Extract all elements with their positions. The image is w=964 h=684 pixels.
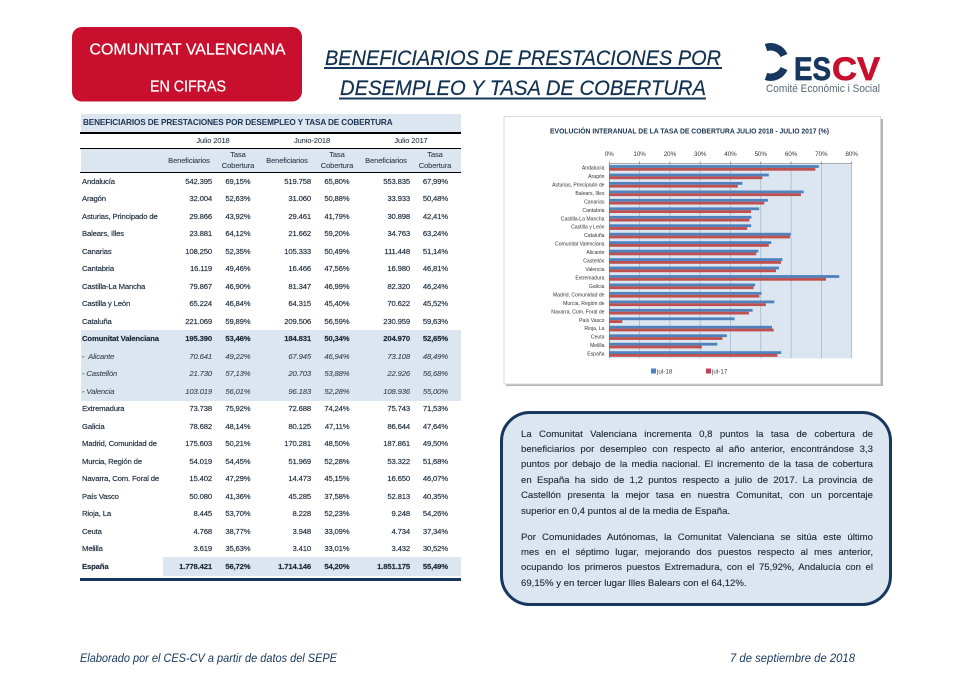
data table <box>80 114 461 581</box>
row: Cantabria <box>82 264 448 273</box>
row: Andalucía: 69,15% <box>225 176 250 186</box>
row: Alicante: 67.945 <box>288 352 311 360</box>
row: Murcia: 53.322 <box>387 456 410 466</box>
row: Comunitat Valenciana: 53,46% <box>225 334 250 343</box>
row: Aragón <box>82 194 448 203</box>
row: Asturias: 41,79% <box>324 212 350 220</box>
row: Asturias: Asturias, Principado de <box>82 212 158 220</box>
row: Extremadura: 75,92% <box>225 404 250 413</box>
row: España: España <box>82 562 108 570</box>
row: Valencia: 103.019 <box>185 386 212 396</box>
legend: jul-17 <box>711 368 728 376</box>
row: Galicia: 80.125 <box>288 422 311 430</box>
row: Madrid <box>82 439 448 448</box>
row: Canarias: 111.448 <box>384 246 410 256</box>
row: Galicia: 48,14% <box>225 422 250 430</box>
paragraph 2 <box>521 532 873 589</box>
row: Melilla: 30,52% <box>423 544 448 553</box>
row: Melilla: Melilla <box>82 544 103 553</box>
row: España: 1.851.175 <box>377 562 410 570</box>
row: Castilla y León: 70.622 <box>387 299 410 308</box>
row: Navarra: 47,29% <box>225 474 250 483</box>
row: Rioja <box>82 509 448 518</box>
row: Balears: 21.662 <box>288 229 311 238</box>
column group headers: Junio-2018 <box>294 136 330 145</box>
column sub-headers: Cobertura <box>222 160 254 170</box>
row: Castilla y León: 64.315 <box>288 299 311 308</box>
row: Cantabria: 16.119 <box>190 264 212 273</box>
row: España: 55,49% <box>423 562 448 570</box>
row: Cantabria: 47,56% <box>324 264 350 273</box>
bars and category labels: Valencia <box>585 267 605 273</box>
row: España: 56,72% <box>225 562 250 570</box>
row: Murcia: 52,28% <box>324 456 350 466</box>
row: Murcia: 54.019 <box>189 456 212 466</box>
axis labels: 80% <box>846 151 858 158</box>
column sub-headers: Cobertura <box>321 160 353 170</box>
row: Andalucía: 542.395 <box>185 176 212 186</box>
bars and category labels: Cataluña <box>584 233 605 239</box>
row: Galicia: 86.644 <box>387 422 410 430</box>
legend: jul-18 <box>656 368 673 376</box>
row: Aragón: Aragón <box>82 194 106 203</box>
row: Castilla-La Mancha: 46,90% <box>225 282 250 290</box>
row: Extremadura: 72.688 <box>288 404 311 413</box>
row: Alicante: 70.641 <box>189 352 212 360</box>
row: Cantabria: 16.466 <box>288 264 311 273</box>
row: Alicante: 49,22% <box>225 352 250 360</box>
bars and category labels: Murcia, Región de <box>563 301 605 307</box>
logo: CES CV <box>764 43 881 95</box>
row: País Vasco: 50.080 <box>189 492 212 500</box>
row: Melilla: 3.432 <box>392 544 410 553</box>
row: Cantabria: 16.980 <box>387 264 410 273</box>
header badge: Comunitat Valenciana en cifras: COMUNITAT VALENCIANA <box>90 41 286 58</box>
row: Navarra: 45,15% <box>324 474 350 483</box>
paragraph 1: superior en 0,4 puntos al de la media de España. <box>521 506 730 517</box>
row: Extremadura: 74,24% <box>324 404 350 413</box>
paragraph 2: 69,15% y en tercer lugar Illes Balears con el 64,12%. <box>521 578 747 589</box>
Comunitat Valenciana highlight band <box>81 330 461 400</box>
row: Murcia: 51.969 <box>288 456 311 466</box>
row: Comunitat Valenciana: 50,34% <box>324 334 350 343</box>
text panel: commentary <box>500 411 892 606</box>
row: Madrid: 48,50% <box>324 439 350 448</box>
footer source note: Elaborado por el CES-CV a partir de datos del SEPE <box>80 653 337 665</box>
logo: CES CV: ES <box>794 51 831 87</box>
row: Cataluña: Cataluña <box>82 316 112 326</box>
row: Madrid: 50,21% <box>225 439 250 448</box>
row: Valencia: 55,00% <box>423 386 448 396</box>
row: Castilla-La Mancha: 46,24% <box>423 282 448 290</box>
axis labels: 0% <box>605 151 614 158</box>
row: Andalucía: 67,99% <box>423 176 448 186</box>
axis labels: 10% <box>633 151 646 158</box>
row: Valencia: 52,28% <box>324 386 350 396</box>
column sub-headers: Tasa <box>329 150 345 159</box>
column sub-headers: Beneficiarios <box>168 156 210 164</box>
row: Aragón: 33.933 <box>387 194 410 203</box>
row: Castellón: 20.703 <box>288 369 311 378</box>
row: España: 1.714.146 <box>278 562 311 570</box>
column group headers: Julio 2017 <box>394 136 428 145</box>
paragraph 1: puntos por debajo de la media nacional. El incremento de la tasa de cobertura <box>521 459 873 470</box>
axis labels: 50% <box>755 151 767 158</box>
bars and category labels <box>551 165 839 358</box>
row: Comunitat Valenciana: 204.970 <box>383 334 410 343</box>
paragraph 1: beneficiarios por desempleo con respecto al año anterior, encontrándose 3,3 <box>521 444 873 455</box>
row: España: 54,20% <box>324 562 350 570</box>
table title band: BENEFICIARIOS DE PRESTACIONES POR DESEMPLEO Y TASA DE COBERTURA <box>83 118 393 127</box>
row: Andalucía: Andalucía <box>82 176 115 186</box>
row: Canarias: 50,49% <box>324 246 350 256</box>
row: Ceuta: 33,09% <box>324 526 350 536</box>
row: Murcia: Murcia, Región de <box>82 456 142 466</box>
row: Comunitat Valenciana: 195.390 <box>185 334 212 343</box>
bars and category labels: Canarias <box>584 199 605 205</box>
row: Aragón: 31.060 <box>288 194 311 203</box>
bars and category labels: Balears, Illes <box>575 191 605 197</box>
bars and category labels: Aragón <box>588 174 605 180</box>
bars and category labels: Navarra, Com. Foral de <box>551 309 605 315</box>
row: Murcia: 51,68% <box>423 456 448 466</box>
row: Asturias: 29.866 <box>189 212 212 220</box>
row: Extremadura: 73.738 <box>189 404 212 413</box>
row: Ceuta: Ceuta <box>82 526 102 536</box>
row: Valencia <box>82 386 448 396</box>
España highlight band <box>163 557 461 576</box>
bars and category labels: Madrid, Comunidad de <box>553 292 605 298</box>
row: Balears: 63,24% <box>423 229 448 238</box>
row: Castilla-La Mancha: Castilla-La Mancha <box>82 282 145 290</box>
row: Cataluña: 59,63% <box>423 316 448 326</box>
column sub-headers: Tasa <box>427 150 443 159</box>
bars and category labels: País Vasco <box>579 318 605 324</box>
row: Castilla-La Mancha: 81.347 <box>288 282 311 290</box>
row: Balears: 23.881 <box>189 229 212 238</box>
axis labels: 30% <box>694 151 707 158</box>
row: País Vasco: 37,58% <box>324 492 350 500</box>
row: Andalucía: 519.758 <box>284 176 311 186</box>
paragraph 2: mes en el séptimo lugar, mejorando dos puestos respecto al mes anterior, <box>521 547 873 558</box>
row: Castellón: 56,68% <box>423 369 448 378</box>
row: Madrid: 187.861 <box>383 439 410 448</box>
plot area and grid <box>609 162 852 358</box>
column sub-headers <box>81 149 461 172</box>
row: Rioja: 53,70% <box>225 509 250 518</box>
axis labels: 40% <box>724 151 737 158</box>
row: Melilla: 3.410 <box>292 544 311 553</box>
row: Asturias: 30.898 <box>387 212 410 220</box>
bars and category labels: Asturias, Principado de <box>552 182 605 188</box>
row: Castellón: 53,88% <box>324 369 350 378</box>
row: Aragón: 32.004 <box>189 194 212 203</box>
row: Alicante: 46,94% <box>324 352 350 360</box>
column sub-headers: Beneficiarios <box>365 156 407 164</box>
header badge: Comunitat Valenciana en cifras <box>72 27 302 102</box>
row: Aragón: 52,63% <box>225 194 250 203</box>
row: Navarra: 14.473 <box>288 474 311 483</box>
bars and category labels: Alicante <box>586 250 605 256</box>
bars and category labels: Comunitat Valenciana <box>555 242 605 248</box>
row: Valencia: 96.183 <box>288 386 311 396</box>
header badge: Comunitat Valenciana en cifras: EN CIFRAS <box>150 78 226 96</box>
row: Castilla y León: 45,40% <box>324 299 350 308</box>
row: Ceuta: 4.734 <box>392 526 410 536</box>
row: País Vasco: 52.813 <box>387 492 410 500</box>
bars and category labels: Castilla-La Mancha <box>561 216 605 222</box>
row: Castilla-La Mancha: 82.320 <box>387 282 410 290</box>
row: Cataluña <box>82 316 448 326</box>
row: Navarra <box>82 474 448 483</box>
paragraph 2: Por Comunidades Autónomas, la Comunitat Valenciana se sitúa este último <box>521 532 873 542</box>
row: Asturias <box>82 212 448 221</box>
row: Cantabria: 46,81% <box>423 264 448 273</box>
row: Comunitat Valenciana: 52,65% <box>423 334 448 343</box>
row: Rioja: Rioja, La <box>82 509 111 518</box>
row: Castellón <box>82 369 448 378</box>
row: Madrid: 175.603 <box>185 439 212 448</box>
row: Castellón: 22.926 <box>387 369 410 378</box>
row: Navarra: Navarra, Com. Foral de <box>82 474 159 483</box>
row: Melilla: 3.619 <box>194 544 212 553</box>
row: Valencia: - Valencia <box>82 386 114 396</box>
logo: CES CV: CV <box>832 51 881 87</box>
row: Cantabria: Cantabria <box>82 264 114 273</box>
column sub-headers: Tasa <box>230 150 246 159</box>
row: Comunitat Valenciana: 184.831 <box>284 334 311 343</box>
axis labels: 20% <box>664 151 677 158</box>
row: Comunitat Valenciana: Comunitat Valenciana <box>82 334 159 343</box>
row: Castilla-La Mancha <box>82 282 448 290</box>
legend <box>651 368 728 376</box>
row: Rioja: 52,23% <box>324 509 350 518</box>
row: Murcia: 54,45% <box>225 456 250 466</box>
row: Comunitat Valenciana <box>82 334 448 343</box>
column group headers: Julio 2018 <box>196 136 230 145</box>
chart title: EVOLUCIÓN INTERANUAL DE LA TASA DE COBERTURA JULIO 2018 - JULIO 2017 (%) <box>550 126 829 136</box>
row: Canarias <box>82 246 448 256</box>
title <box>324 47 722 100</box>
row: Ceuta: 4.768 <box>194 526 212 536</box>
row: Andalucía: 553.835 <box>383 176 410 186</box>
row: Ceuta: 3.948 <box>292 526 311 536</box>
row: Aragón: 50,88% <box>324 194 350 203</box>
paragraph 1: La Comunitat Valenciana incrementa 0,8 puntos la tasa de cobertura de <box>521 428 873 440</box>
row: Murcia <box>82 456 448 466</box>
row: Rioja: 8.445 <box>194 509 212 518</box>
row: Galicia: 78.682 <box>189 422 212 430</box>
bars and category labels: Melilla <box>590 343 605 349</box>
row: Madrid: Madrid, Comunidad de <box>82 439 157 448</box>
row: País Vasco: 40,35% <box>423 492 448 500</box>
row: Navarra: 16.650 <box>387 474 410 483</box>
row: Cataluña: 56,59% <box>324 316 350 326</box>
row: Rioja: 54,26% <box>423 509 448 518</box>
paragraph 1: Castellón presenta la mejor tasa en nuestra Comunitat, con un porcentaje <box>521 490 873 501</box>
row: Balears: 64,12% <box>225 229 250 238</box>
bars and category labels: Castellón <box>583 259 605 265</box>
row: España <box>82 562 448 571</box>
row: Melilla: 35,63% <box>225 544 250 553</box>
row: País Vasco <box>82 492 448 500</box>
row: Alicante: 48,49% <box>423 352 448 360</box>
row: Asturias: 42,41% <box>423 212 448 220</box>
bars and category labels: Rioja, La <box>584 326 605 332</box>
row: Extremadura: 71,53% <box>423 404 448 413</box>
row: Andalucía <box>82 176 448 186</box>
row: Cataluña: 230.959 <box>383 316 410 326</box>
row: Castellón: 57,13% <box>225 369 250 378</box>
row: Castilla y León: 46,84% <box>225 299 250 308</box>
row: Aragón: 50,48% <box>423 194 448 203</box>
row: España: 1.778.421 <box>179 562 212 570</box>
panel: bar chart <box>504 116 883 386</box>
row: Castellón: 21.730 <box>189 369 212 378</box>
bars and category labels: Ceuta <box>591 335 605 341</box>
axis labels <box>605 151 858 158</box>
row: Valencia: 56,01% <box>225 386 250 396</box>
row: Asturias: 43,92% <box>225 212 250 220</box>
row: Castellón: - Castellón <box>82 369 117 378</box>
row: Ceuta: 38,77% <box>225 526 250 536</box>
bars and category labels: España <box>587 352 605 358</box>
row: Rioja: 8.228 <box>292 509 311 518</box>
row: Balears <box>82 229 448 238</box>
title: DESEMPLEO Y TASA DE COBERTURA <box>340 77 706 100</box>
axis labels: 70% <box>815 151 828 158</box>
bars and category labels: Galicia <box>589 284 605 290</box>
axis labels: 60% <box>785 151 798 158</box>
title: BENEFICIARIOS DE PRESTACIONES POR <box>325 47 721 70</box>
row: Valencia: 108.936 <box>383 386 410 396</box>
row: Navarra: 46,07% <box>423 474 448 483</box>
row: Cantabria: 49,46% <box>225 264 250 273</box>
row: Alicante: 73.108 <box>387 352 410 360</box>
row: Navarra: 15.402 <box>189 474 212 483</box>
row: Cataluña: 59,89% <box>225 316 250 326</box>
chart frame <box>504 116 883 386</box>
row: Extremadura: 75.743 <box>387 404 410 413</box>
row: Asturias: 29.461 <box>288 212 311 220</box>
bars and category labels: Extremadura <box>575 276 605 282</box>
row: Canarias: 108.250 <box>185 246 212 256</box>
row: Galicia <box>82 422 448 430</box>
row: Madrid: 170.281 <box>284 439 311 448</box>
bars and category labels: Cantabria <box>582 208 605 214</box>
paragraph 1: en España ha sido de 1,2 puntos respecto a julio de 2017. La provincia de <box>521 475 873 486</box>
row: País Vasco: País Vasco <box>82 492 119 500</box>
row: Galicia: 47,11% <box>325 422 350 430</box>
row: Alicante: - Alicante <box>82 352 114 360</box>
column group headers <box>196 136 428 145</box>
row: País Vasco: 45.285 <box>288 492 311 500</box>
footer date: 7 de septiembre de 2018 <box>730 653 856 665</box>
row: Balears: 59,20% <box>324 229 350 238</box>
row: Cataluña: 221.069 <box>185 316 212 326</box>
row: Andalucía: 65,80% <box>324 176 350 186</box>
row: Melilla <box>82 544 448 553</box>
row: Castilla-La Mancha: 79.867 <box>189 282 212 290</box>
paragraph 1 <box>521 428 873 517</box>
row: Madrid: 49,50% <box>423 439 448 448</box>
row: Alicante <box>82 352 448 360</box>
row: Extremadura <box>82 404 448 413</box>
table title band <box>81 114 461 132</box>
row: Cataluña: 209.506 <box>284 316 311 326</box>
row: Ceuta <box>82 526 448 536</box>
row: Balears: Balears, Illes <box>82 229 124 238</box>
row: Canarias: 52,35% <box>225 246 250 256</box>
row: Canarias: 51,14% <box>423 246 448 256</box>
row: Castilla-La Mancha: 46,99% <box>324 282 350 290</box>
bars and category labels: Castilla y León <box>571 225 605 231</box>
row: Ceuta: 37,34% <box>423 526 448 536</box>
row: Castilla y León: 65.224 <box>189 299 212 308</box>
row: Galicia: 47,64% <box>423 422 448 430</box>
column sub-headers: Beneficiarios <box>266 156 308 164</box>
row: Galicia: Galicia <box>82 422 104 430</box>
bars and category labels: Andalucía <box>582 165 605 171</box>
row: Castilla y León: Castilla y León <box>82 299 130 308</box>
row: Rioja: 9.248 <box>392 509 410 518</box>
row: Melilla: 33,01% <box>324 544 350 553</box>
paragraph 2: ocupando los primeros puestos Extremadura, con el 75,92%, Andalucía con el <box>521 562 873 573</box>
row: País Vasco: 41,36% <box>225 492 250 500</box>
row: Canarias: 105.333 <box>284 246 311 256</box>
row: Extremadura: Extremadura <box>82 404 124 413</box>
row: Balears: 34.763 <box>387 229 410 238</box>
row: Castilla y León <box>82 299 448 308</box>
row: Canarias: Canarias <box>82 246 112 256</box>
row: Castilla y León: 45,52% <box>423 299 448 308</box>
column sub-headers: Cobertura <box>419 160 451 170</box>
